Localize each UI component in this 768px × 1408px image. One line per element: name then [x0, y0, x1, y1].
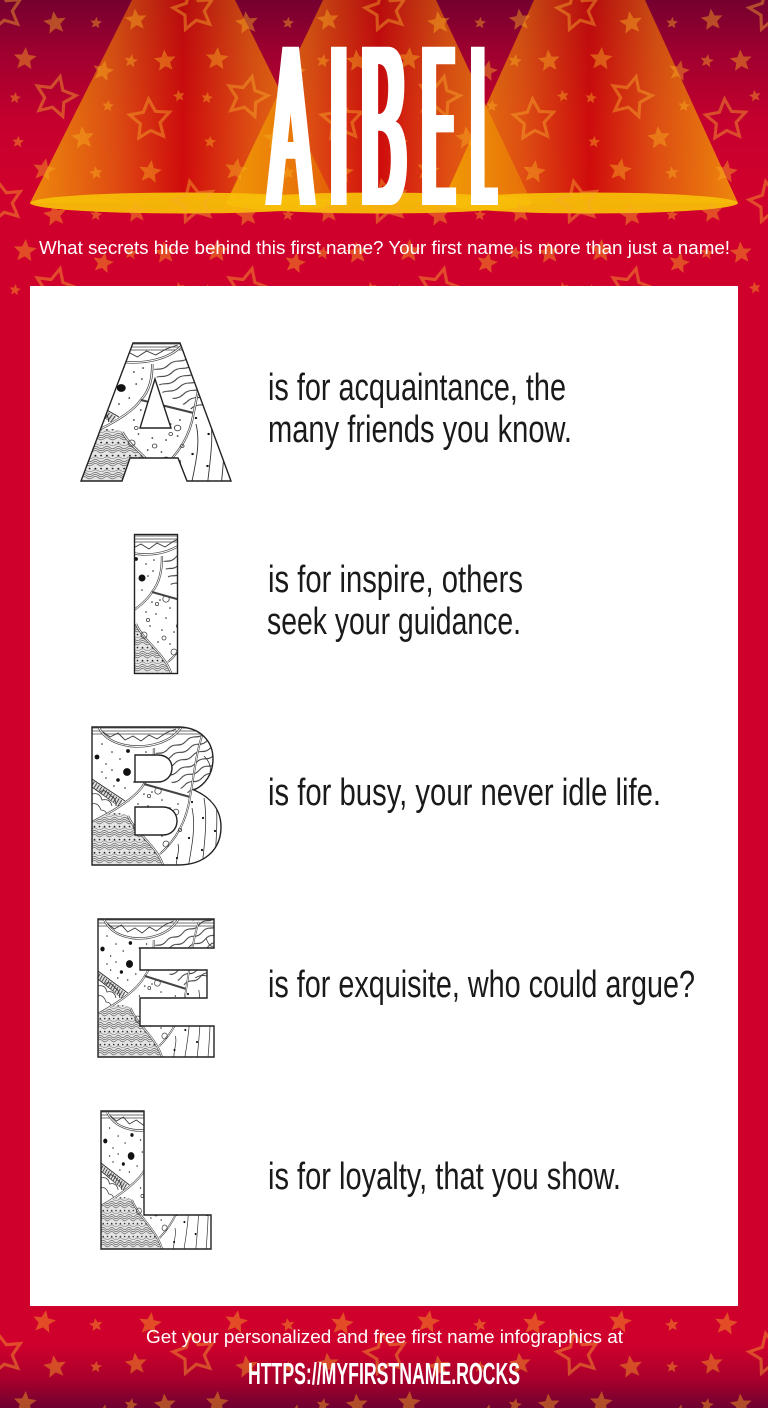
icon: doodle letter A — [80, 342, 232, 482]
text: letter A line: is for acquaintance, the — [268, 367, 566, 409]
footer url: HTTPS://MYFIRSTNAME.ROCKS — [248, 1356, 520, 1391]
icon: doodle letter L — [100, 1110, 212, 1250]
text: letter B line: is for busy, your never idle life. — [268, 772, 661, 814]
title — [270, 0, 494, 255]
text: letter I line: seek your guidance. — [267, 601, 521, 643]
footer text: Get your personalized and free first name infographics at — [146, 1327, 623, 1347]
spotlights — [30, 0, 738, 214]
icon: doodle letter B — [91, 726, 222, 866]
text: letter L line: is for loyalty, that you show. — [268, 1156, 621, 1198]
title: E — [423, 0, 453, 255]
text: letter I line — [267, 559, 523, 643]
title: B — [362, 0, 405, 254]
panel: white content card — [30, 286, 738, 1306]
text: letter A line — [268, 367, 572, 451]
subtitle: What secrets hide behind this first name? Your first name is more than just a name! — [39, 238, 730, 258]
text: letter A line: many friends you know. — [268, 409, 572, 451]
title: I — [330, 0, 347, 254]
text: letter I line: is for inspire, others — [268, 559, 523, 601]
title: L — [473, 0, 494, 254]
title: A — [270, 0, 311, 254]
icon: doodle letter I — [134, 534, 178, 674]
icon: doodle letter E — [97, 918, 215, 1058]
